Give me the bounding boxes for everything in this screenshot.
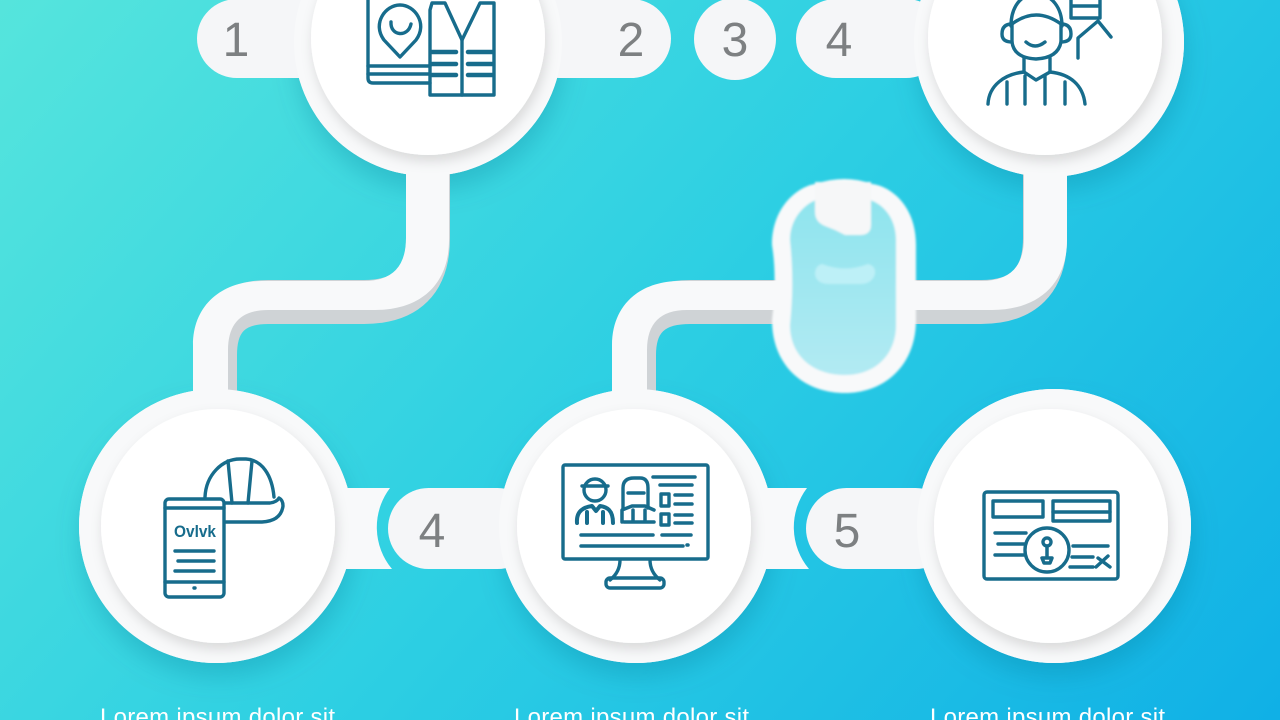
step 2 label pill: 2 xyxy=(618,14,644,67)
step 1 label pill xyxy=(197,0,347,78)
circle drop shadows xyxy=(79,0,1191,663)
step 4 label pill, top: 4 xyxy=(826,14,852,67)
step 2 label pill xyxy=(520,0,671,78)
circle: bottom right with certificate icon xyxy=(917,389,1191,663)
icon: worker with headset and robot arm xyxy=(988,0,1111,104)
icon: phone and hard hat xyxy=(165,459,283,597)
step 5 label pill: 5 xyxy=(834,505,860,558)
icon: monitor with two workers and text lines xyxy=(563,465,708,588)
icon: phone and hard hat: Ovlvk xyxy=(174,522,216,541)
step 4 label pill, bottom: 4 xyxy=(419,505,445,558)
step 3 label circle xyxy=(694,0,776,80)
bottom connector, circle 1 to step 4 xyxy=(330,488,392,569)
circle: bottom left with helmet icon xyxy=(79,389,353,663)
circle: top right with worker icon xyxy=(914,0,1184,177)
step 5 label pill xyxy=(806,488,956,569)
left connector path xyxy=(193,170,449,395)
circle: bottom middle with monitor icon xyxy=(499,389,773,663)
right connector path xyxy=(612,170,1067,395)
step 4 label pill, top xyxy=(796,0,946,78)
middle capsule xyxy=(772,179,916,393)
icon: phone with location pin and safety vest xyxy=(368,0,494,95)
step 3 label circle: 3 xyxy=(722,14,748,67)
circle: top left with vest icon xyxy=(294,0,562,176)
step 1 label pill: 1 xyxy=(223,14,249,67)
bottom connector, circle 2 to step 5 xyxy=(750,488,809,569)
step 4 label pill, bottom xyxy=(388,488,538,569)
icon: certificate card with seal xyxy=(984,492,1118,579)
